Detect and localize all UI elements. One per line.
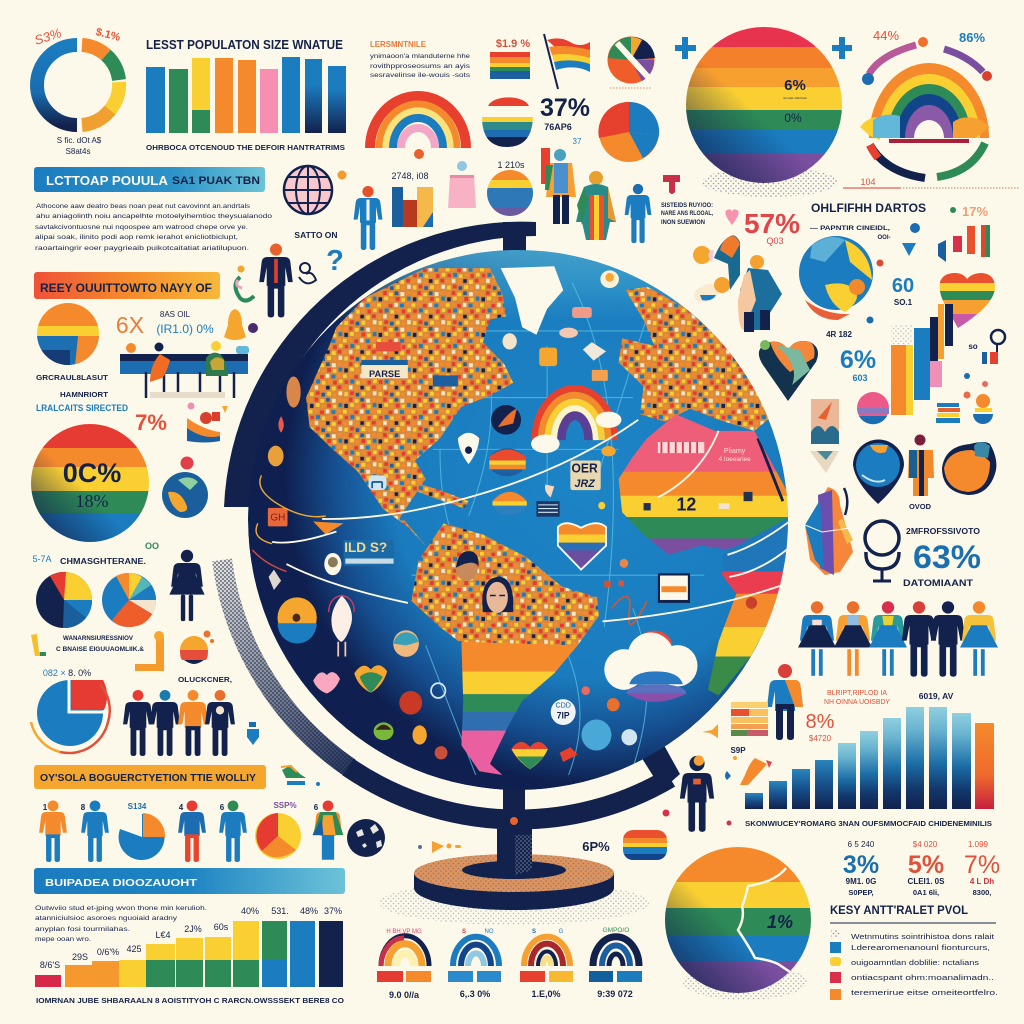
icon: rainbow arch — [370, 96, 466, 148]
stats: ring symbol and percent text: 6X — [116, 312, 144, 338]
banner: orange heading — [34, 272, 220, 299]
group of four figures: OLUCKCNER, — [178, 675, 232, 684]
coloured icons on dark ocean: 7IP — [557, 711, 570, 721]
chart: stepped stacked bars: 29S — [72, 952, 88, 962]
stat: 60 blue — [866, 223, 920, 324]
legend: key panel: ouigoamntlan doblilie: nctalians — [851, 960, 980, 967]
panel: top-left donut chart: S3% — [32, 25, 63, 48]
text block: left intro paragraph — [35, 203, 272, 252]
heading: right panel: — PAPNTIR CINEIDL, — [810, 225, 890, 232]
icon: large rainbow with clouds and arcs: 44% — [873, 28, 899, 43]
decorative red dots near stand — [662, 810, 732, 826]
icon: wire globe — [284, 166, 346, 214]
icon: orange arrow dots — [418, 841, 461, 853]
continent: east coast rainbow — [708, 518, 788, 696]
globe stand shadow — [379, 881, 649, 925]
icon: magnifier and small marks: so — [968, 342, 978, 351]
text block: center right note — [661, 202, 713, 226]
globe ring lower band — [222, 560, 680, 827]
figures: top center cluster: 1 210s — [497, 160, 525, 170]
continent: Europe and Asia — [619, 287, 772, 431]
stat: split bowl and 37 percent: 37% — [540, 94, 590, 122]
label: s9p with orange shape: S9P — [730, 746, 746, 755]
continent: South America confetti — [411, 523, 599, 645]
stat: 60 blue: SO.1 — [894, 298, 913, 307]
icon: dark moon ball — [347, 819, 385, 857]
icon: magnifier and small marks — [964, 330, 1005, 387]
panel: two pie charts: WANARNSIURESSNIOV — [63, 635, 134, 642]
stat: 60 blue: 60 — [892, 275, 914, 297]
coloured icons on dark ocean — [268, 376, 637, 769]
mini bars — [392, 187, 433, 227]
icon: blonde head — [224, 309, 258, 340]
poster: small painting — [810, 399, 839, 473]
text block: left intro paragraph: savtakcivontuosne nui nqoospee am watrood chepe orve ye. — [35, 224, 248, 231]
heading: right panel: 17% — [962, 204, 988, 219]
panel: two pie charts: CHMASGHTERANE. — [60, 557, 146, 566]
figure: orange and navy person — [908, 434, 934, 511]
panel: lower right rainbow sphere — [664, 847, 812, 1000]
panel: large rainbow circle with percentages — [31, 423, 149, 543]
icon: small blue pin — [247, 722, 259, 745]
rainbow heart on ocean — [558, 523, 606, 570]
panel: top middle heading and paragraph: sesravelinse ile-wouis -sots — [370, 72, 471, 79]
chart: stepped stacked bars: 0/6'% — [97, 947, 119, 957]
stat: 57 percent: Q03 — [766, 236, 784, 246]
map pins and ovals: OER — [571, 461, 598, 475]
figures and pies row: 6 — [314, 803, 319, 812]
stat: 6 percent: 603 — [852, 373, 868, 383]
arch 2 — [448, 929, 501, 999]
chart: stepped stacked bars: 8/6'S — [40, 960, 60, 970]
arch 2: S — [462, 929, 466, 935]
figure: rainbow robe — [576, 171, 616, 240]
arch 4: 9:39 072 — [597, 989, 633, 999]
banner: blue heading — [34, 167, 265, 192]
text patches on North America — [361, 342, 458, 386]
label: 104 with dotted rule: 104 — [860, 177, 876, 187]
panel: lower left figures and pies banner: OY'SOLA BOGUERCTYETION TTIE WOLLIY — [40, 773, 256, 784]
africa labels: 4 Ioeeariee — [719, 456, 751, 463]
legend: key panel: Lderearomenanounl fionturcurs, — [851, 945, 990, 952]
label: small red heading: $4720 — [809, 734, 832, 743]
pie chart 2 — [102, 573, 156, 627]
rainbow on ocean — [531, 388, 621, 453]
stat: 7 percent: 7% — [135, 410, 167, 435]
figure: orange and navy person: OVOD — [909, 502, 932, 511]
stats: three percentages — [843, 840, 1000, 897]
icon: symbol with stat 63 percent: DATOMIAANT — [903, 578, 974, 588]
legend: key panel: teremerirue eitse omeiteortfelro. — [851, 990, 998, 997]
figures and pies row: 1 — [43, 803, 48, 812]
icon: small wave chart — [187, 402, 228, 442]
figure: navy man bottom right — [680, 755, 714, 832]
stats: three percentages: 0A1 6li, — [913, 888, 939, 897]
figures and pies row: S134 — [128, 802, 147, 811]
figure: pink — [448, 161, 476, 208]
continent: Greenland — [501, 266, 563, 335]
big rainbow sphere: 0% — [784, 111, 802, 125]
chart: stepped stacked bars: 37% — [324, 906, 342, 916]
heading: bar chart title: LESST POPULATON SIZE WNATUE — [146, 38, 343, 52]
panel: top-left donut chart: $.1% — [94, 26, 122, 44]
text block: lower paragraph: anyplan fosi tourmilahas. — [35, 926, 130, 933]
small perspective bars — [938, 225, 990, 262]
heading: right panel: OOI- — [878, 235, 891, 241]
globe stand base — [414, 825, 614, 910]
icon: rainbow heart — [940, 273, 995, 328]
icon: sunset ball — [487, 170, 533, 216]
icon: symbol with stat 63 percent: 63% — [913, 539, 981, 575]
heading: right panel: OHLFIFHH DARTOS — [811, 201, 926, 215]
stats: three percentages: 9M1. 0G — [846, 877, 876, 886]
icon: small map glyph — [281, 765, 320, 786]
figures and pies row: 8 — [81, 803, 86, 812]
map grid lines — [411, 283, 704, 775]
icon: orange blob — [942, 442, 996, 495]
icon: headset outline — [299, 263, 316, 283]
panel: top-left donut chart — [32, 25, 122, 156]
arch 4 — [589, 927, 642, 999]
globe ring upper arc — [224, 222, 536, 507]
stats: ring symbol and percent text: (IR1.0) 0% — [156, 322, 214, 336]
stats: three percentages: CLEI1. 0S — [908, 877, 945, 886]
text block: lower paragraph — [35, 905, 207, 943]
label: small red heading: NH OINNA UOISBDY — [824, 699, 890, 706]
pie chart: red yellow orange — [255, 813, 301, 859]
stat: split bowl and 37 percent: 37 — [573, 137, 582, 146]
text block: lower paragraph: mepe ooan wro. — [35, 936, 91, 943]
icons: books and stacked ball — [936, 392, 993, 424]
figure: rainbow dress — [313, 800, 343, 860]
icon: large rainbow with clouds and arcs: 86% — [959, 30, 985, 45]
text block: left intro paragraph: ahu aniagolinth noiu ancapelhte motoelyihemtioc theysualanodo — [36, 213, 272, 220]
icon: crossed pie symbol — [608, 36, 655, 88]
panel: bar stack and small icons — [702, 702, 768, 738]
icon: rainbow flag — [544, 34, 590, 89]
legend: key panel: ontiacspant ohm:moanalimadn.. — [851, 975, 994, 982]
arch 4: GMPO/O — [603, 927, 629, 934]
panel: top-left donut chart: S8at4s — [66, 147, 90, 156]
stats: three percentages: S0PEP, — [848, 888, 874, 897]
label: small red heading: BLRIPT,RIPLOD IA — [827, 690, 887, 697]
chart: stepped stacked bars: 425 — [126, 944, 142, 954]
cloud with rainbow — [604, 631, 697, 702]
panel: stripe swatch with label — [490, 38, 530, 79]
label: satto on with question mark: ? — [326, 245, 344, 277]
flight lines — [272, 420, 792, 621]
panel: four small rainbow arches — [377, 927, 642, 1000]
banner: orange heading: REEY OUUITTOWTO NAYY OF — [40, 283, 212, 295]
globe map artwork — [252, 266, 797, 779]
panel: lower right rainbow sphere: 1% — [767, 912, 793, 932]
text block: lower paragraph: Outwviio stud et-jping wvon thone min kerulioh. — [35, 905, 207, 912]
icon: large rainbow with clouds and arcs — [860, 31, 992, 182]
panel: two pie charts: C BNAISE EIGUUAOMLIIK.& — [56, 646, 144, 653]
group of four figures — [123, 675, 235, 756]
text block: left intro paragraph: alipai soak, ilinito podi aop remk ierahot enicliotbiclupt, — [35, 234, 238, 241]
panel: quadrant pie with ring — [31, 668, 110, 753]
chart: stepped stacked bars: 48% — [300, 906, 318, 916]
arch 3: 1.E,0% — [531, 989, 561, 999]
stats: ring symbol and percent text: 8AS OIL — [160, 310, 191, 319]
icons: small L shapes and sunset ball — [31, 630, 214, 671]
text block: left intro paragraph: raoartaingrir eoer paygrieaib puikotcaitatiat ariatilupuon. — [35, 245, 249, 252]
panel: top bar chart: OHRBOCA OTCENOUD THE DEFOIR HANTRATRIMS — [146, 143, 345, 152]
small abstract figure near orange banner — [236, 266, 254, 301]
coloured icons on dark ocean: CDD — [555, 700, 571, 710]
legend: key panel: Wetnmutins sointrihistoa dons ralait — [851, 934, 994, 941]
figures and pies row: 6 — [220, 803, 225, 812]
stats: three percentages: 5% — [908, 851, 944, 879]
chart: stepped stacked bars: 60s — [214, 922, 229, 932]
panel: large rainbow circle with percentages: 18% — [76, 491, 108, 511]
banner: lower blue heading: BUIPADEA DIOOZAUOHT — [45, 877, 198, 889]
arch 3 — [520, 929, 573, 999]
map pins and ovals: JRZ — [575, 478, 595, 490]
icon: earth globe right — [799, 236, 884, 339]
stat: 6P percent with rainbow pill: 6P% — [582, 839, 610, 854]
illustration: people at a desk — [120, 341, 249, 398]
label: s9p with orange shape — [725, 746, 772, 785]
stats: three percentages: $4 020 — [913, 840, 938, 849]
pie chart 1 — [36, 572, 92, 628]
banner: blue heading: LCTTOAP POUULA — [46, 173, 169, 188]
chart: stepped stacked bars — [35, 906, 344, 1005]
coloured icons on dark ocean: ILD S? — [344, 539, 387, 555]
africa labels — [676, 446, 751, 514]
panel: sunset pie circle — [36, 303, 128, 413]
stats: three percentages: 3% — [843, 851, 879, 879]
pie chart: top center — [598, 102, 659, 162]
figure: blue man — [354, 186, 382, 250]
label: satto on with question mark: SATTO ON — [294, 230, 338, 240]
stats: three percentages: 1.099 — [968, 840, 989, 849]
arch 2: NO — [484, 929, 494, 935]
panel: top middle heading and paragraph — [370, 39, 471, 79]
panel: top middle heading and paragraph: rovithpproseosums an ayis — [370, 63, 471, 70]
chart: stepped stacked bars: L€4 — [155, 930, 171, 940]
stat: 6P percent with rainbow pill — [582, 830, 667, 860]
panel: sunset pie circle: HAMNRIORT — [60, 390, 108, 399]
text block: center right note: INON SUEWION — [661, 219, 705, 226]
figure: navy man — [259, 244, 293, 317]
text block: center right note: SISTEIDS RUY/OO: — [661, 202, 713, 209]
continent: North America — [306, 268, 513, 546]
figure: navy woman — [169, 550, 205, 621]
panel: lower left figures and pies banner — [34, 765, 266, 789]
stats: three percentages: 7% — [964, 851, 1000, 879]
icon: colourful heart — [759, 340, 818, 401]
icon: earth globe right: 4R 182 — [826, 330, 852, 339]
icon: plus signs — [675, 37, 852, 59]
icon: globe location pin — [853, 440, 904, 504]
label: small red heading: 8% — [806, 711, 835, 733]
label: small red heading: 6019, AV — [919, 691, 954, 701]
big rainbow sphere: 6% — [784, 77, 806, 94]
figure: blue man right — [625, 184, 651, 243]
text patches on North America: PARSE — [369, 369, 400, 380]
map pins and ovals — [369, 270, 619, 517]
africa labels: Pliamy — [724, 446, 746, 455]
panel: stripe swatch with label: $1.9 % — [496, 38, 530, 50]
stats: ring symbol and percent text — [116, 310, 214, 338]
small card and scribble — [604, 559, 690, 625]
banner: blue heading: SA1 PUAK TBN — [172, 175, 260, 187]
big rainbow sphere: nnnnsie ntsbt fesn — [783, 96, 808, 100]
icon: striped ball — [857, 392, 889, 424]
icon: red T — [663, 175, 680, 194]
big rainbow sphere — [684, 27, 844, 197]
chart: rising bars right — [745, 707, 994, 828]
icon: symbol with stat 63 percent: 2MFROFSSIVOTO — [906, 527, 980, 536]
icon: small earth with pin — [162, 456, 208, 518]
stat: 6 percent: 6% — [840, 346, 876, 374]
label: small red heading — [806, 690, 954, 743]
icon: symbol with stat 63 percent — [865, 521, 981, 588]
chart: stepped stacked bars: IOMRNAN JUBE SHBARAALN 8 AOISTITYOH C RARCN.OWSSSEKT BERE8 CO — [36, 996, 344, 1005]
figures and pies row: SSP% — [273, 801, 297, 810]
arch 3: S — [532, 929, 536, 935]
chart: staggered bars — [891, 304, 953, 415]
panel: quadrant pie with ring: 082 × 8. 0% — [43, 668, 91, 678]
figure: multicolour — [541, 148, 576, 224]
panel: large rainbow circle with percentages: 0C% — [63, 458, 121, 488]
stat: split bowl and 37 percent — [482, 94, 590, 147]
figures: top center cluster — [354, 148, 680, 250]
arch 2: 6,.3 0% — [460, 989, 490, 999]
stats: three percentages: 6 5 240 — [848, 840, 875, 849]
stat: split bowl and 37 percent: 76AP6 — [544, 122, 572, 132]
figures: abstract cluster below 57 percent — [693, 235, 782, 332]
amber and red arcs — [252, 475, 326, 571]
panel: two pie charts — [32, 541, 159, 653]
chart: stepped stacked bars: 40% — [241, 906, 259, 916]
globe — [248, 250, 797, 790]
panel: sunset pie circle: LRALCAITS SIRECTED — [36, 403, 128, 413]
chart: rising bars right: SKONWIUCEY'ROMARG 3NAN OUFSMMOCFAID CHIDENEMINILIS — [745, 821, 992, 828]
arch 1: H BH VP MG — [386, 929, 422, 935]
text block: center right note: NARE ANS RLOOAL, — [661, 210, 713, 217]
panel: two pie charts: OO — [145, 541, 159, 551]
legend: key panel — [830, 903, 998, 1000]
figures: row of six people — [798, 601, 998, 677]
figure: person above bar chart — [767, 664, 803, 740]
stat: 57 percent — [725, 208, 800, 246]
stats: three percentages: 8300, — [973, 888, 991, 897]
chart: stepped stacked bars: 531. — [271, 906, 289, 916]
continent: Central America islands — [417, 484, 468, 509]
panel: sunset pie circle: GRCRAUL8LASUT — [36, 373, 108, 382]
figures and pies row — [39, 800, 343, 862]
portraits on South America — [456, 551, 513, 613]
africa labels: 12 — [676, 494, 696, 514]
panel: top middle heading and paragraph: ynimaoon'a mlanduterne hhe — [370, 53, 470, 60]
coloured icons on dark ocean: GH — [270, 512, 285, 523]
text block: lower paragraph: atanniciulsioc asoroes nguoiaid aradny — [35, 915, 178, 922]
arch 1 — [377, 929, 431, 1000]
panel: two pie charts: 5-7A — [32, 554, 52, 564]
banner: lower blue heading — [34, 868, 345, 894]
continent: Africa rainbow — [615, 409, 794, 557]
figure: rainbow cloak — [805, 487, 853, 575]
label: satto on with question mark — [294, 230, 344, 277]
figures and pies row: 4 — [179, 803, 184, 812]
pie chart: blue orange — [119, 813, 165, 860]
text block: left intro paragraph: Athocone aaw deatro beas noan peat nut cavovinnt an.andrtals — [36, 203, 251, 210]
panel: top-left donut chart: S fic. dOt A$ — [57, 136, 102, 145]
continent: South America rainbow — [462, 642, 578, 775]
panel: top bar chart — [146, 38, 346, 152]
heading: right panel — [810, 201, 988, 241]
stats: three percentages: 4 L Dh — [970, 877, 994, 886]
stat: 57 percent: 57% — [744, 208, 800, 239]
chart: stepped stacked bars: 2J% — [184, 924, 202, 934]
arch 3: G — [559, 929, 564, 935]
figures: top center cluster: 2748, i08 — [391, 171, 429, 181]
panel: top middle heading and paragraph: LERSMNTNILE — [370, 39, 426, 49]
arch 1: 9.0 0//a — [389, 990, 420, 1000]
legend: key panel: KESY ANTT'RALET PVOL — [830, 903, 968, 917]
